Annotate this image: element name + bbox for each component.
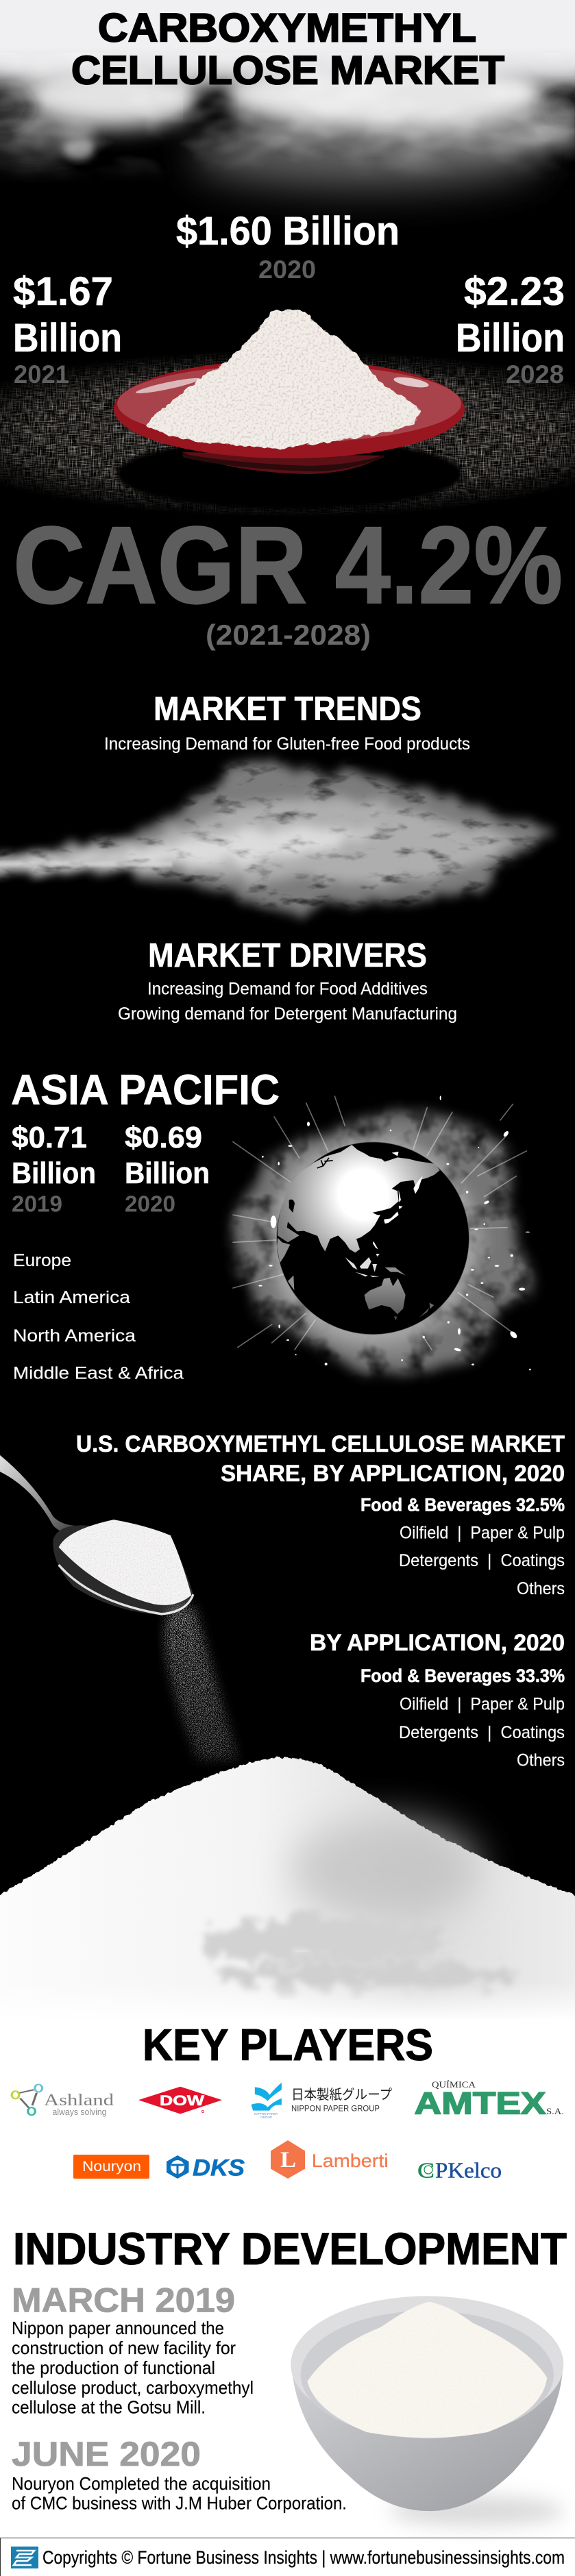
CAGR headline: (2021-2028) [206,619,371,651]
stat: 2028 value: 2028 [506,360,564,388]
stat: 2020: 2020 [125,1191,175,1217]
event: March 2019: construction of new facility for [12,2338,236,2358]
event: March 2019: MARCH 2019 [12,2281,235,2320]
stat: 2020: $0.69 [125,1121,202,1154]
logo: Quimica Amtex: QUÍMICA [432,2079,476,2090]
region list: Europe [13,1251,71,1270]
logo: CP Kelco: C [417,2158,435,2183]
region list: North America [13,1326,136,1346]
heading: U.S. share: SHARE, BY APPLICATION, 2020 [221,1461,565,1487]
smoke clouds [0,0,575,184]
panel: footer [0,2538,575,2576]
title: CELLULOSE MARKET [71,48,504,93]
region list: Middle East & Africa [13,1363,184,1383]
logo: Nippon Paper Group: NIPPON PAPER GROUP [291,2104,380,2114]
stat: 2028 value [456,269,565,388]
logo: DKS [167,2155,245,2181]
logo: Lamberti: L [280,2148,296,2172]
icon: globe with burst [233,1095,531,1375]
plate shadow [117,438,462,510]
list: global segments: Oilfield | Paper & Pulp [400,1694,565,1713]
panel: market trends [0,691,559,1024]
stat: 2021 value: Billion [13,316,122,360]
logo: Nouryon [73,2155,149,2179]
heading: MARKET TRENDS [154,691,421,728]
icon: spoon pouring powder onto pile [0,1455,575,2021]
logo: Lamberti [271,2140,389,2179]
panel: industry development [12,2223,567,2526]
heading: U.S. share [76,1431,565,1487]
logo: DKS: DKS [193,2155,245,2181]
list: U.S. segments: Oilfield | Paper & Pulp [400,1524,565,1543]
stat: 2020 value [176,209,400,284]
event: June 2020: of CMC business with J.M Huber Corporation. [12,2492,347,2513]
stat: 2020 [125,1121,210,1217]
event: March 2019 [12,2281,254,2418]
stat: 2020: Billion [125,1156,210,1190]
stat: 2020 value: 2020 [258,256,316,284]
list: global segments: Others [517,1751,565,1770]
icon: red plate with powder [114,310,465,474]
logo: Ashland: Ashland [44,2092,114,2109]
stat: 2019: Billion [12,1156,96,1190]
logo: Quimica Amtex: S.A. [546,2106,564,2116]
heading: KEY PLAYERS [143,2020,433,2070]
event: March 2019: cellulose product, carboxymethyl [12,2377,254,2398]
logo: Ashland: always solving [52,2107,107,2117]
event: June 2020: JUNE 2020 [12,2435,201,2473]
panel: application share [0,1431,575,2021]
stat: 2019 [12,1121,96,1217]
event: June 2020: Nouryon Completed the acquisition [12,2473,271,2494]
logo: Nippon Paper Group: GROUP [260,2116,272,2119]
stat: 2021 value: 2021 [14,360,69,388]
title [71,5,504,93]
panel: key players [12,2020,564,2183]
event: March 2019: the production of functional [12,2357,215,2378]
logo: Nippon Paper Group [251,2083,392,2119]
logo: Nippon Paper Group: 日本製紙グループ [291,2087,392,2103]
stat: 2019: 2019 [12,1191,62,1217]
stat: 2020 value: $1.60 Billion [176,209,400,253]
driver text: Growing demand for Detergent Manufacturing [118,1004,457,1024]
list: global segments [360,1665,565,1770]
list: global segments: Food & Beverages 33.3% [360,1665,565,1686]
stat: 2021 value: $1.67 [13,269,113,314]
icon: Fortune Business Insights logo [11,2547,38,2568]
logo: CP Kelco: PKelco [435,2158,502,2183]
list: U.S. segments: Food & Beverages 32.5% [360,1495,565,1515]
logo: Nouryon: Nouryon [82,2159,141,2175]
heading: ASIA PACIFIC [11,1067,280,1114]
logo: Dow [138,2087,222,2114]
wooden table [0,349,575,517]
driver text: Increasing Demand for Food Additives [147,980,428,999]
stat: 2019: $0.71 [12,1121,87,1154]
logo: Nippon Paper Group: NIPPON PAPER [254,2112,278,2116]
list: global segments: Detergents | Coatings [399,1723,565,1742]
logo: Quimica Amtex [414,2079,564,2121]
logo: Quimica Amtex: AMTEX [414,2086,546,2121]
heading: global share: BY APPLICATION, 2020 [310,1630,565,1656]
event: March 2019: cellulose at the Gotsu Mill. [12,2397,206,2418]
list: U.S. segments: Detergents | Coatings [399,1551,565,1570]
list: U.S. segments [360,1495,565,1598]
driver text [118,980,457,1024]
title: CARBOXYMETHYL [98,5,476,51]
logo: Lamberti: Lamberti [312,2151,389,2171]
logo: Ashland [12,2084,114,2117]
icon: powder spray [0,762,559,914]
panel: hero [0,0,575,651]
trend text: Increasing Demand for Gluten-free Food products [104,734,470,754]
region list [13,1251,184,1383]
region list: Latin America [13,1288,130,1307]
stat: 2028 value: $2.23 [464,269,565,314]
icon: bowl of powder [291,2296,565,2526]
event: March 2019: Nippon paper announced the [12,2318,224,2338]
list: U.S. segments: Others [517,1579,565,1598]
panel: regions [11,1067,531,1383]
event: June 2020 [12,2435,347,2513]
stat: 2021 value [13,269,122,388]
logo: Dow: DOW [160,2093,204,2109]
stat: 2028 value: Billion [456,316,565,360]
drivers heading: MARKET DRIVERS [148,937,427,974]
